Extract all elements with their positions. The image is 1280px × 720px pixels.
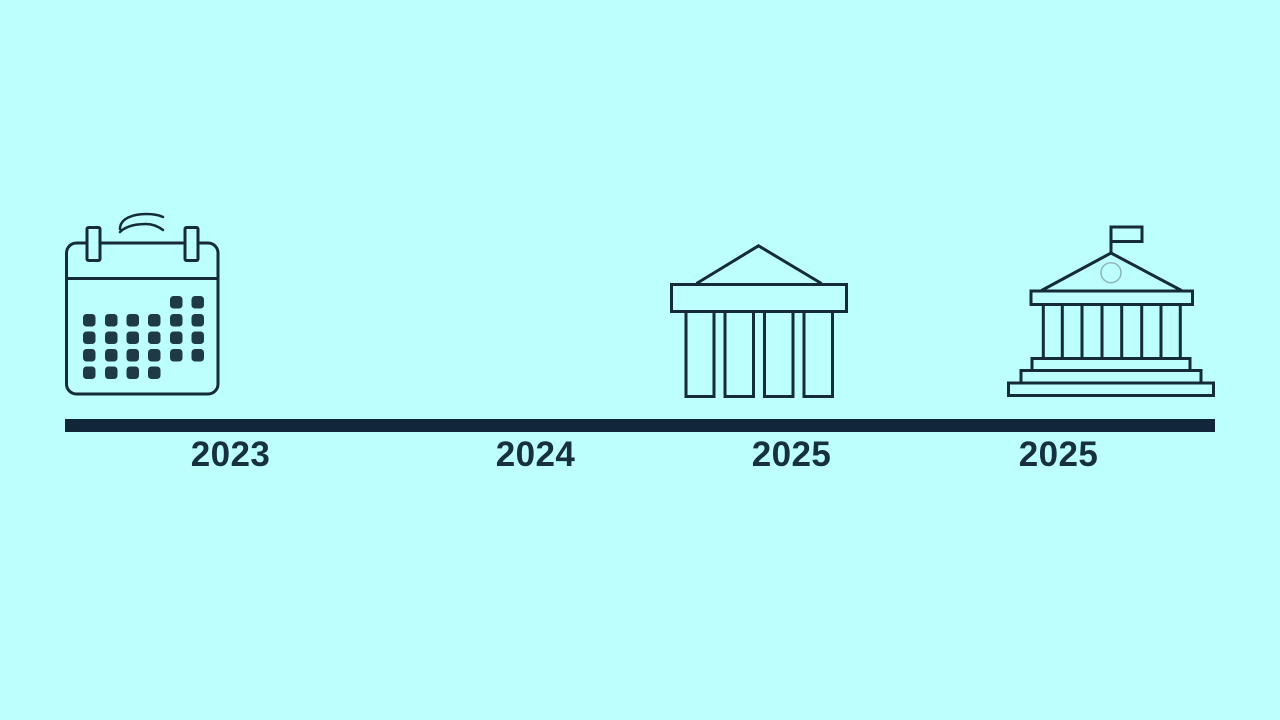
flag xyxy=(1111,227,1142,253)
calendar motion arcs xyxy=(120,214,163,232)
stepped base xyxy=(1008,358,1214,396)
icon: simple columned building xyxy=(672,246,846,396)
pediment circle xyxy=(1101,263,1121,283)
year label: 2025 (second): 2025 xyxy=(1019,435,1098,474)
year label: 2024: 2024 xyxy=(496,435,575,474)
simple building entablature xyxy=(672,284,846,312)
simple building roof xyxy=(696,246,822,284)
year label: 2023: 2023 xyxy=(191,435,270,474)
colonnade xyxy=(1043,304,1180,358)
entablature xyxy=(1031,291,1192,304)
calendar body xyxy=(66,243,218,394)
year label: 2025: 2025 xyxy=(752,435,831,474)
calendar binding rings xyxy=(87,228,198,260)
icon: calendar xyxy=(66,214,218,394)
calendar date dots xyxy=(83,296,204,379)
icon: government building with flag xyxy=(1008,227,1214,396)
simple building columns xyxy=(686,312,832,396)
timeline bar xyxy=(65,419,1215,432)
pediment roof xyxy=(1042,253,1182,290)
